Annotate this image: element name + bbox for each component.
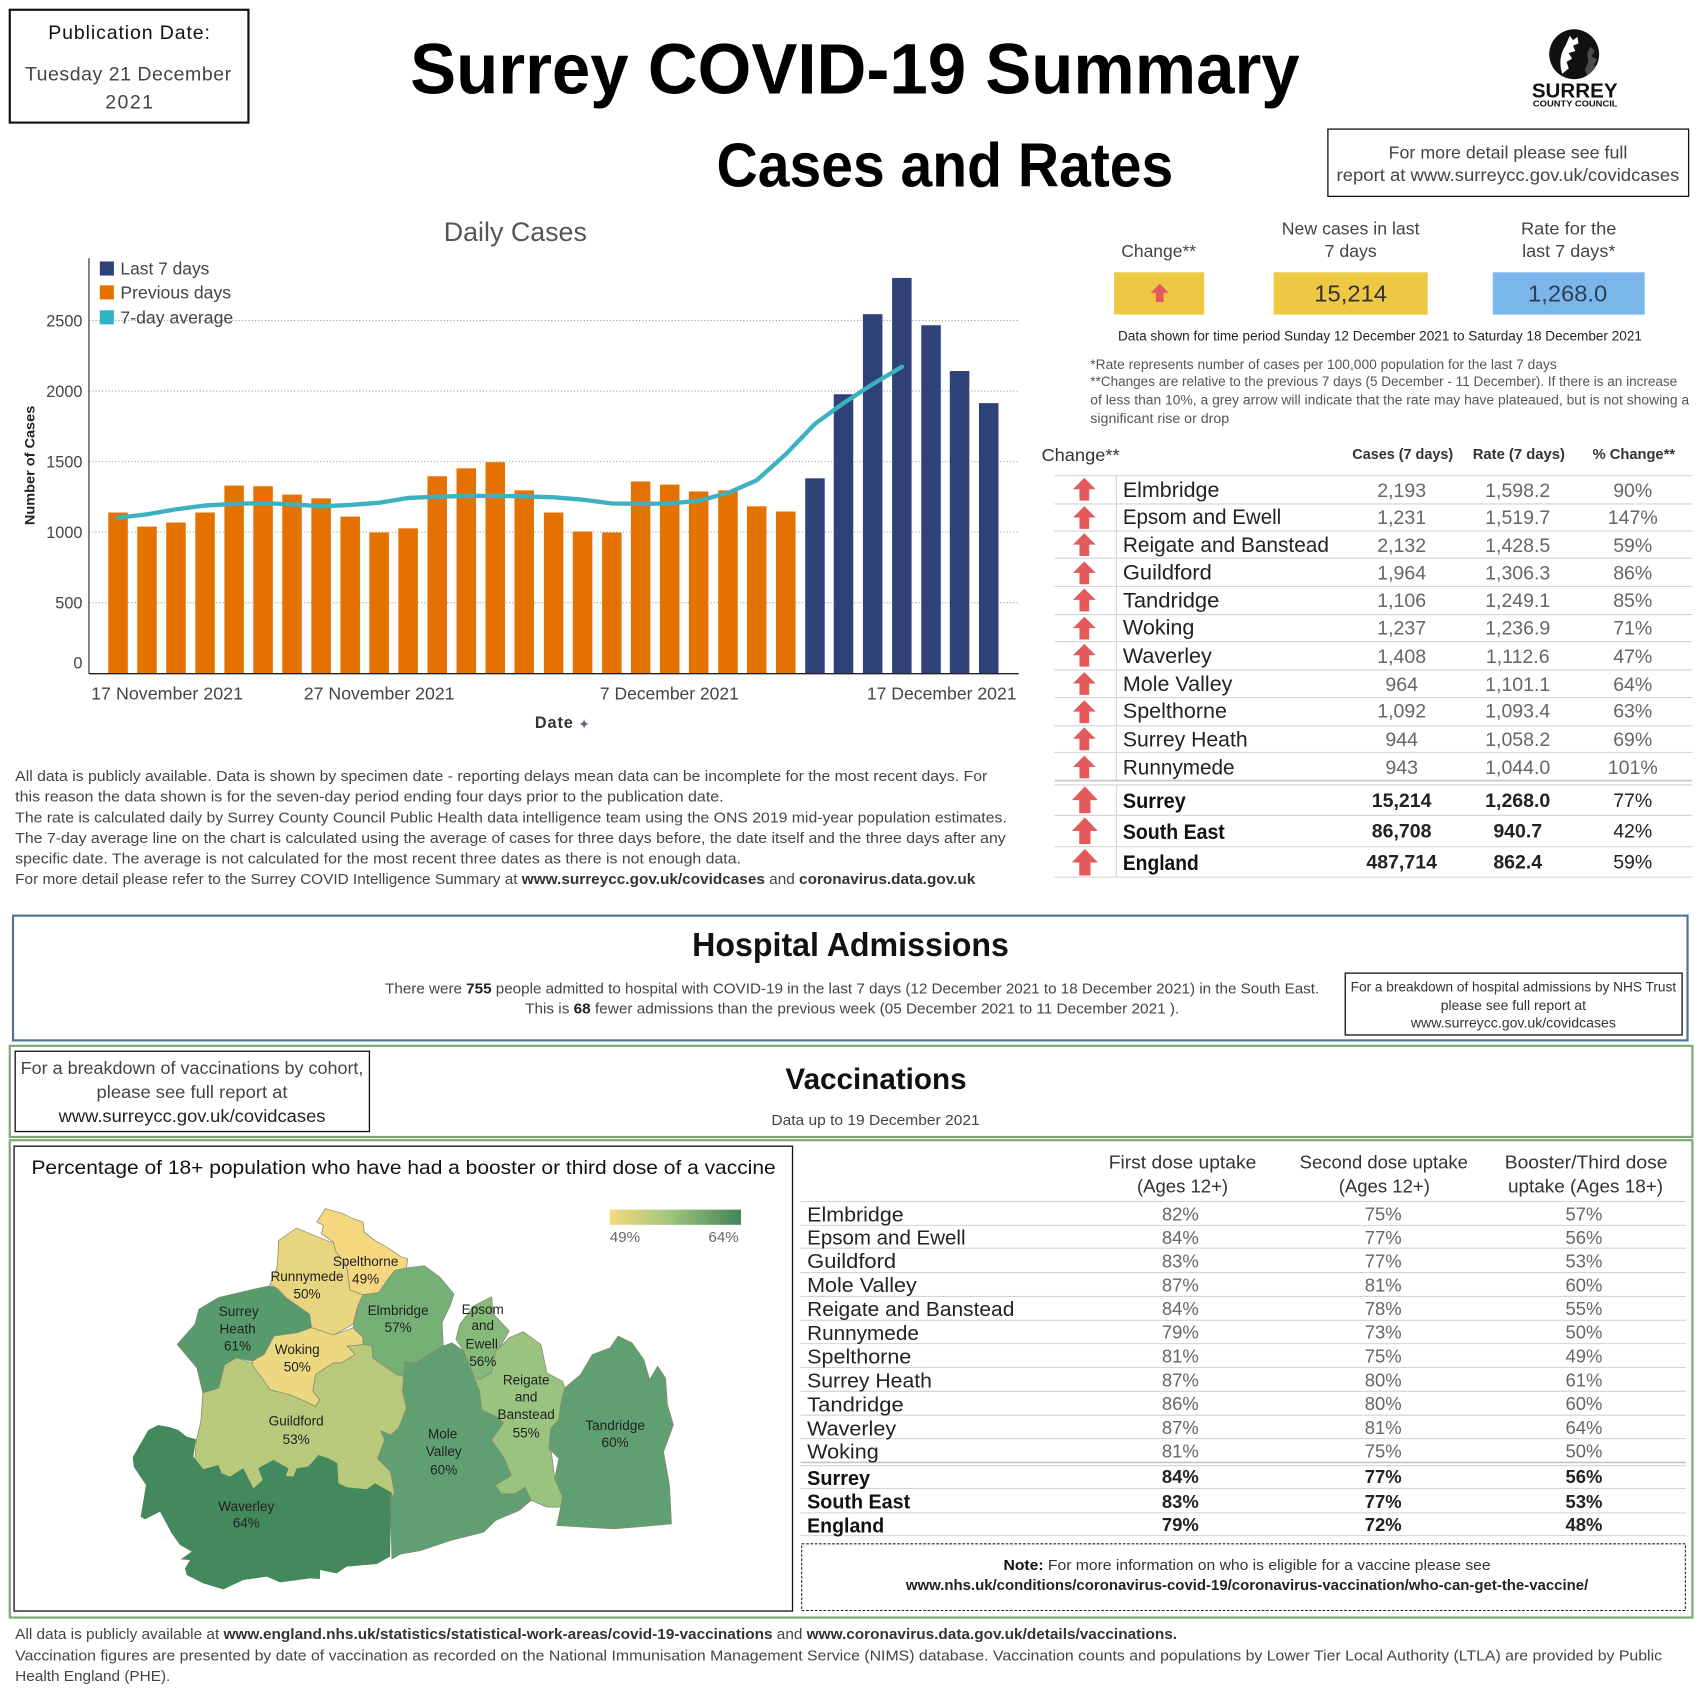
row: Waverley: 87% bbox=[1162, 1417, 1199, 1438]
chart heading: Daily Cases: Daily Cases bbox=[444, 216, 587, 247]
row: Elmbridge: 1,598.2 bbox=[1485, 480, 1550, 502]
row: Waverley bbox=[1073, 643, 1652, 668]
row: Spelthorne: Spelthorne bbox=[807, 1347, 911, 1369]
row: Elmbridge: 82% bbox=[1162, 1203, 1199, 1224]
row: Epsom and Ewell: 84% bbox=[1162, 1227, 1199, 1248]
map labels: Epsom bbox=[462, 1302, 504, 1317]
row: Guildford: Guildford bbox=[807, 1251, 896, 1273]
map labels: 50% bbox=[284, 1359, 311, 1374]
row: Surrey: 77% bbox=[1613, 790, 1652, 812]
callout: cohort breakdown bbox=[15, 1051, 369, 1132]
row: Epsom and Ewell: 147% bbox=[1608, 507, 1658, 529]
row: South East: South East bbox=[1123, 819, 1225, 844]
row: Tandridge: 80% bbox=[1365, 1393, 1402, 1414]
callout: NHS trust breakdown: please see full report at bbox=[1441, 998, 1586, 1013]
row: England bbox=[807, 1514, 1602, 1537]
row: England: 862.4 bbox=[1493, 851, 1542, 873]
text block: vaccination sources: All data is publicly available at www.england.nhs.uk/statistics/statistical-work-areas/covid-19-vaccinations and www.coronavirus.data.gov.uk/details/vaccinations. bbox=[15, 1626, 1177, 1643]
map labels: 60% bbox=[430, 1462, 457, 1477]
row: Spelthorne: 1,092 bbox=[1377, 701, 1426, 723]
panel: vaccinations header bbox=[10, 1046, 1692, 1137]
row: Surrey Heath: 1,058.2 bbox=[1485, 729, 1550, 751]
map labels: Reigate bbox=[503, 1372, 550, 1387]
row: Spelthorne: 1,093.4 bbox=[1485, 701, 1550, 723]
title: Surrey COVID-19 Summary bbox=[410, 29, 1300, 109]
bar chart: daily cases: 17 November 2021 bbox=[91, 684, 243, 704]
text block: vaccination sources: Vaccination figures are presented by date of vaccination as recorded on the National Immunisation Management Service (NIMS) database. Vaccination counts and populations by Lower Tier Local Authority (LTLA) are provided by Public bbox=[15, 1647, 1662, 1664]
map labels: Tandridge bbox=[585, 1418, 645, 1433]
row: Surrey Heath: 69% bbox=[1613, 729, 1652, 751]
row: Surrey Heath bbox=[807, 1369, 1602, 1393]
publication date box: 2021 bbox=[105, 91, 153, 113]
row: South East bbox=[1072, 817, 1652, 844]
row: Epsom and Ewell: 1,231 bbox=[1377, 507, 1426, 529]
panel: lower vaccinations frame bbox=[10, 1140, 1692, 1618]
logo: Surrey County Council bbox=[1532, 29, 1618, 108]
row: Woking bbox=[1073, 615, 1652, 640]
chart legend: Last 7 days bbox=[120, 258, 210, 278]
row: Elmbridge bbox=[1073, 477, 1652, 502]
map labels: Valley bbox=[426, 1444, 462, 1459]
column headers: Second dose uptake bbox=[1300, 1151, 1468, 1172]
table: cases by district: Rate (7 days) bbox=[1473, 447, 1565, 463]
row: Surrey Heath: 87% bbox=[1162, 1369, 1199, 1390]
text block: data notes bbox=[15, 768, 1007, 888]
row: Surrey: 56% bbox=[1565, 1466, 1602, 1487]
row: Reigate and Banstead bbox=[807, 1298, 1602, 1321]
row: Waverley: 64% bbox=[1565, 1417, 1602, 1438]
row: England: 487,714 bbox=[1366, 851, 1437, 873]
row: Mole Valley: 1,101.1 bbox=[1485, 674, 1550, 696]
row: Surrey Heath: 80% bbox=[1365, 1369, 1402, 1390]
bar chart: daily cases: 17 December 2021 bbox=[867, 684, 1017, 704]
rate footnotes: significant rise or drop bbox=[1090, 411, 1229, 426]
map labels: and bbox=[471, 1318, 494, 1333]
row: Reigate and Banstead: 2,132 bbox=[1377, 535, 1426, 557]
row: Spelthorne: 75% bbox=[1365, 1346, 1402, 1367]
bar chart: daily cases: 500 bbox=[55, 595, 82, 613]
row: Runnymede: 50% bbox=[1565, 1322, 1602, 1343]
bar chart: daily cases: 2500 bbox=[46, 313, 82, 331]
row: Elmbridge: Elmbridge bbox=[807, 1205, 904, 1227]
table: cases by district: Change** bbox=[1041, 445, 1120, 465]
map labels: and bbox=[515, 1390, 537, 1405]
more detail callout bbox=[1328, 129, 1689, 196]
rate footnotes: of less than 10%, a grey arrow will indicate that the rate may have plateaued, but is not showing a bbox=[1090, 393, 1690, 408]
row: Surrey Heath: Surrey Heath bbox=[1123, 726, 1248, 751]
headline KPI panel: New cases in last bbox=[1282, 218, 1420, 238]
heading: Cases and Rates: Cases and Rates bbox=[717, 132, 1173, 201]
map labels: Elmbridge bbox=[368, 1303, 429, 1318]
map labels: Surrey bbox=[219, 1304, 259, 1319]
rate footnotes: **Changes are relative to the previous 7 days (5 December - 11 December). If there is an increase bbox=[1090, 374, 1677, 389]
row: Woking: 1,237 bbox=[1377, 618, 1426, 640]
note box: vaccine eligibility bbox=[802, 1544, 1685, 1610]
row: Spelthorne bbox=[807, 1346, 1602, 1369]
map labels: Waverley bbox=[218, 1499, 274, 1514]
map labels: 53% bbox=[283, 1432, 310, 1447]
map labels: 56% bbox=[469, 1354, 496, 1369]
logo: Surrey County Council: COUNTY COUNCIL bbox=[1533, 99, 1618, 108]
row: Surrey: 84% bbox=[1162, 1466, 1199, 1487]
row: Tandridge: 1,106 bbox=[1377, 590, 1426, 612]
bar chart: daily cases: 27 November 2021 bbox=[304, 684, 455, 704]
headline KPI panel: 15,214 bbox=[1314, 281, 1387, 307]
row: South East: South East bbox=[807, 1492, 911, 1514]
row: Waverley: Waverley bbox=[1123, 643, 1212, 668]
row: Mole Valley: Mole Valley bbox=[1123, 671, 1233, 696]
row: Tandridge: 86% bbox=[1162, 1393, 1199, 1414]
map labels: 49% bbox=[352, 1271, 379, 1286]
time period note: Data shown for time period Sunday 12 December 2021 to Saturday 18 December 2021 bbox=[1118, 329, 1642, 344]
choropleth map: Surrey districts bbox=[133, 1209, 673, 1589]
chart legend bbox=[100, 258, 233, 327]
map labels bbox=[218, 1254, 645, 1531]
row: Tandridge: 60% bbox=[1565, 1393, 1602, 1414]
headline KPI panel: Change** bbox=[1121, 241, 1196, 261]
headline KPI panel: 1,268.0 bbox=[1528, 281, 1607, 307]
row: England: 72% bbox=[1365, 1514, 1402, 1535]
bar chart: daily cases: 2000 bbox=[46, 383, 82, 401]
map labels: Woking bbox=[275, 1342, 320, 1357]
row: England: England bbox=[1123, 850, 1199, 875]
table: vaccine uptake bbox=[801, 1151, 1686, 1537]
row: Spelthorne: Spelthorne bbox=[1123, 698, 1227, 723]
row: Surrey: 1,268.0 bbox=[1485, 790, 1550, 812]
row: Epsom and Ewell: 77% bbox=[1365, 1227, 1402, 1248]
map labels: 64% bbox=[233, 1516, 260, 1531]
column headers: uptake (Ages 18+) bbox=[1508, 1175, 1663, 1196]
row: Woking bbox=[807, 1441, 1602, 1464]
admissions summary text: This is 68 fewer admissions than the previous week (05 December 2021 to 11 December 2021 ). bbox=[525, 1000, 1179, 1017]
row: Spelthorne: 63% bbox=[1613, 701, 1652, 723]
note box: vaccine eligibility: Note: For more information on who is eligible for a vaccine please see bbox=[1004, 1558, 1491, 1574]
text block: data notes: The rate is calculated daily by Surrey County Council Public Health data intelligence team using the ONS 2019 mid-year population estimates. bbox=[15, 809, 1007, 826]
row: Epsom and Ewell bbox=[1073, 504, 1658, 529]
row: Spelthorne: 49% bbox=[1565, 1346, 1602, 1367]
row: Guildford: Guildford bbox=[1123, 559, 1212, 584]
row: Tandridge bbox=[1073, 588, 1652, 613]
callout: NHS trust breakdown: For a breakdown of hospital admissions by NHS Trust bbox=[1351, 980, 1676, 995]
row: Waverley: 47% bbox=[1613, 646, 1652, 668]
admissions summary text: There were 755 people admitted to hospital with COVID-19 in the last 7 days (12 December 2021 to 18 December 2021) in the South East. bbox=[385, 981, 1319, 998]
row: Mole Valley: 81% bbox=[1365, 1275, 1402, 1296]
row: Runnymede: Runnymede bbox=[1123, 755, 1235, 780]
callout: NHS trust breakdown: www.surreycc.gov.uk/covidcases bbox=[1410, 1015, 1616, 1030]
headline KPI panel: last 7 days* bbox=[1522, 241, 1616, 261]
row: Surrey: Surrey bbox=[807, 1468, 871, 1490]
map labels: 55% bbox=[513, 1425, 540, 1440]
row: Guildford: 1,306.3 bbox=[1485, 562, 1550, 584]
row: Surrey: 77% bbox=[1365, 1466, 1402, 1487]
map labels: Mole bbox=[428, 1427, 457, 1442]
row: Elmbridge: 75% bbox=[1365, 1203, 1402, 1224]
row: Mole Valley: Mole Valley bbox=[807, 1275, 917, 1297]
map labels: Banstead bbox=[498, 1407, 555, 1422]
row: Surrey Heath: 944 bbox=[1385, 729, 1418, 751]
bar chart: daily cases: 1500 bbox=[46, 454, 82, 472]
heading: Hospital Admissions: Hospital Admissions bbox=[692, 927, 1009, 964]
row: South East: 86,708 bbox=[1372, 821, 1432, 843]
row: Mole Valley: 60% bbox=[1565, 1275, 1602, 1296]
colour legend: 64% bbox=[708, 1229, 739, 1246]
row: South East: 940.7 bbox=[1493, 821, 1542, 843]
panel: booster map bbox=[14, 1146, 793, 1611]
row: Guildford: 53% bbox=[1565, 1251, 1602, 1272]
row: Tandridge bbox=[807, 1393, 1602, 1416]
column headers: (Ages 12+) bbox=[1339, 1175, 1430, 1196]
row: Surrey bbox=[807, 1466, 1602, 1490]
colour legend: 49% bbox=[610, 1229, 640, 1246]
callout: cohort breakdown: please see full report at bbox=[97, 1082, 288, 1102]
callout: cohort breakdown: For a breakdown of vaccinations by cohort, bbox=[21, 1058, 363, 1078]
row: South East: 77% bbox=[1365, 1491, 1402, 1512]
row: Woking: 50% bbox=[1565, 1441, 1602, 1462]
callout: NHS trust breakdown bbox=[1345, 973, 1682, 1035]
panel: hospital admissions bbox=[13, 916, 1688, 1040]
bar chart: daily cases: Date bbox=[535, 714, 573, 732]
row: Mole Valley: 87% bbox=[1162, 1275, 1199, 1296]
row: Surrey: Surrey bbox=[1123, 788, 1186, 813]
row: Runnymede bbox=[1073, 755, 1658, 780]
row: Guildford bbox=[1073, 559, 1652, 584]
text block: data notes: For more detail please refer to the Surrey COVID Intelligence Summary at www.surreycc.gov.uk/covidcases and coronavirus.data.gov.uk bbox=[15, 871, 976, 888]
row: Woking: 81% bbox=[1162, 1441, 1199, 1462]
publication date box: Publication Date: bbox=[48, 22, 210, 44]
row: Spelthorne: 81% bbox=[1162, 1346, 1199, 1367]
publication date box: Tuesday 21 December bbox=[25, 63, 232, 85]
column headers bbox=[1109, 1151, 1667, 1196]
row: Elmbridge: Elmbridge bbox=[1123, 477, 1219, 502]
table: cases by district: Cases (7 days) bbox=[1352, 447, 1453, 463]
row: England bbox=[1072, 849, 1652, 875]
row: Surrey bbox=[1072, 787, 1652, 813]
text block: data notes: The 7-day average line on the chart is calculated using the average of cases for three days before, the date itself and the three days after any bbox=[15, 830, 1006, 847]
column headers: First dose uptake bbox=[1109, 1151, 1256, 1172]
row: Mole Valley: 64% bbox=[1613, 674, 1652, 696]
row: Epsom and Ewell: Epsom and Ewell bbox=[1123, 504, 1281, 529]
row: Runnymede: 101% bbox=[1608, 757, 1658, 779]
bar chart: daily cases: 7 December 2021 bbox=[600, 684, 739, 704]
logo: Surrey County Council: SURREY bbox=[1532, 80, 1618, 103]
row: Waverley: 1,112.6 bbox=[1486, 646, 1550, 668]
row: Guildford: 86% bbox=[1613, 562, 1652, 584]
row: Epsom and Ewell: 1,519.7 bbox=[1485, 507, 1550, 529]
map labels: Guildford bbox=[269, 1414, 324, 1429]
row: Elmbridge: 57% bbox=[1565, 1203, 1602, 1224]
bar chart: daily cases: 1000 bbox=[46, 524, 82, 542]
row: Woking: Woking bbox=[807, 1442, 879, 1464]
map heading: Percentage of 18+ population who have had a booster or third dose of a vaccine bbox=[31, 1157, 776, 1179]
table: cases by district: % Change** bbox=[1593, 447, 1675, 463]
row: Tandridge: 85% bbox=[1613, 590, 1652, 612]
row: Epsom and Ewell: 56% bbox=[1565, 1227, 1602, 1248]
row: Reigate and Banstead: 59% bbox=[1613, 535, 1652, 557]
map labels: Runnymede bbox=[270, 1269, 344, 1284]
text block: vaccination sources: Health England (PHE). bbox=[15, 1668, 170, 1685]
row: Woking: Woking bbox=[1123, 615, 1194, 640]
chart legend: 7-day average bbox=[120, 307, 233, 327]
row: Elmbridge: 2,193 bbox=[1377, 480, 1426, 502]
colour legend bbox=[610, 1210, 741, 1246]
map labels: 60% bbox=[602, 1435, 629, 1450]
row: Runnymede bbox=[807, 1322, 1602, 1345]
data date note: Data up to 19 December 2021 bbox=[771, 1112, 980, 1129]
row: South East: 42% bbox=[1613, 821, 1652, 843]
row: South East: 53% bbox=[1565, 1491, 1602, 1512]
text block: data notes: this reason the data shown is for the seven-day period ending four days prior to the publication date. bbox=[15, 789, 724, 806]
map labels: 50% bbox=[293, 1287, 321, 1302]
row: Woking: 75% bbox=[1365, 1441, 1402, 1462]
row: Reigate and Banstead: Reigate and Banstead bbox=[807, 1299, 1014, 1321]
map labels: Spelthorne bbox=[333, 1254, 398, 1269]
row: England: 48% bbox=[1565, 1514, 1602, 1535]
row: Elmbridge: 90% bbox=[1613, 480, 1652, 502]
more detail callout: report at www.surreycc.gov.uk/covidcases bbox=[1337, 165, 1680, 185]
row: Waverley: 1,408 bbox=[1377, 646, 1426, 668]
row: England: 59% bbox=[1613, 851, 1652, 873]
bar chart: daily cases: ✦ bbox=[578, 716, 590, 732]
row: Surrey: 15,214 bbox=[1372, 790, 1432, 812]
row: Guildford: 83% bbox=[1162, 1251, 1199, 1272]
row: Waverley bbox=[807, 1417, 1602, 1440]
row: Epsom and Ewell bbox=[807, 1227, 1602, 1249]
row: Runnymede: 943 bbox=[1385, 757, 1418, 779]
row: Waverley: 81% bbox=[1365, 1417, 1402, 1438]
row: Waverley: Waverley bbox=[807, 1418, 896, 1440]
row: Mole Valley bbox=[1073, 671, 1652, 696]
heading: Vaccinations: Vaccinations bbox=[785, 1063, 967, 1096]
row: Guildford bbox=[807, 1251, 1602, 1273]
bar chart: daily cases bbox=[23, 258, 1019, 732]
admissions summary text bbox=[385, 981, 1319, 1017]
note box: vaccine eligibility: www.nhs.uk/conditions/coronavirus-covid-19/coronavirus-vaccination/who-can-get-the-vaccine/ bbox=[905, 1578, 1588, 1594]
rate footnotes bbox=[1090, 357, 1690, 426]
more detail callout: For more detail please see full bbox=[1389, 142, 1627, 162]
row: Woking: 1,236.9 bbox=[1485, 618, 1550, 640]
row: Reigate and Banstead: 55% bbox=[1565, 1298, 1602, 1319]
map labels: Heath bbox=[220, 1321, 256, 1336]
row: Reigate and Banstead: Reigate and Banstead bbox=[1123, 532, 1329, 557]
headline KPI panel: Rate for the bbox=[1521, 218, 1616, 238]
row: Woking: 71% bbox=[1613, 618, 1652, 640]
bar chart: daily cases: Number of Cases bbox=[23, 406, 38, 525]
row: Surrey Heath bbox=[1073, 726, 1652, 751]
row: Tandridge: Tandridge bbox=[1123, 588, 1219, 613]
row: Epsom and Ewell: Epsom and Ewell bbox=[807, 1227, 966, 1249]
row: Surrey Heath: 61% bbox=[1565, 1369, 1602, 1390]
row: Runnymede: 73% bbox=[1365, 1322, 1402, 1343]
chart legend: Previous days bbox=[120, 282, 231, 302]
row: Reigate and Banstead: 1,428.5 bbox=[1485, 535, 1550, 557]
map labels: 57% bbox=[385, 1320, 412, 1335]
bar chart: daily cases: 0 bbox=[73, 654, 82, 672]
row: Reigate and Banstead bbox=[1073, 532, 1652, 557]
headline KPI panel bbox=[1114, 218, 1645, 315]
rate footnotes: *Rate represents number of cases per 100,000 population for the last 7 days bbox=[1090, 357, 1557, 372]
row: South East bbox=[807, 1491, 1602, 1514]
column headers: Booster/Third dose bbox=[1505, 1151, 1667, 1172]
row: Tandridge: 1,249.1 bbox=[1485, 590, 1550, 612]
column headers: (Ages 12+) bbox=[1137, 1175, 1228, 1196]
row: Spelthorne bbox=[1073, 698, 1652, 723]
row: Mole Valley bbox=[807, 1275, 1602, 1297]
row: Tandridge: Tandridge bbox=[807, 1394, 904, 1416]
map labels: Ewell bbox=[465, 1337, 498, 1352]
map labels: 61% bbox=[224, 1339, 251, 1354]
row: Runnymede: Runnymede bbox=[807, 1323, 919, 1345]
publication date box bbox=[10, 10, 248, 123]
headline KPI panel: 7 days bbox=[1325, 241, 1377, 261]
table: cases by district bbox=[1041, 445, 1692, 877]
row: Guildford: 77% bbox=[1365, 1251, 1402, 1272]
row: South East: 83% bbox=[1162, 1491, 1199, 1512]
text block: data notes: All data is publicly available. Data is shown by specimen date - reporting delays mean data can be incomplete for the most recent days. For bbox=[15, 768, 987, 785]
row: Runnymede: 79% bbox=[1162, 1322, 1199, 1343]
row: Guildford: 1,964 bbox=[1377, 562, 1426, 584]
row: Reigate and Banstead: 78% bbox=[1365, 1298, 1402, 1319]
row: England: England bbox=[807, 1515, 884, 1537]
callout: cohort breakdown: www.surreycc.gov.uk/covidcases bbox=[58, 1106, 326, 1126]
row: England: 79% bbox=[1162, 1514, 1199, 1535]
text block: data notes: specific date. The average is not calculated for the most recent three dates as there is not enough data. bbox=[15, 851, 741, 868]
row: Mole Valley: 964 bbox=[1385, 674, 1418, 696]
row: Reigate and Banstead: 84% bbox=[1162, 1298, 1199, 1319]
row: Runnymede: 1,044.0 bbox=[1485, 757, 1550, 779]
row: Elmbridge bbox=[807, 1203, 1602, 1227]
row: Surrey Heath: Surrey Heath bbox=[807, 1371, 932, 1393]
text block: vaccination sources bbox=[15, 1626, 1662, 1685]
